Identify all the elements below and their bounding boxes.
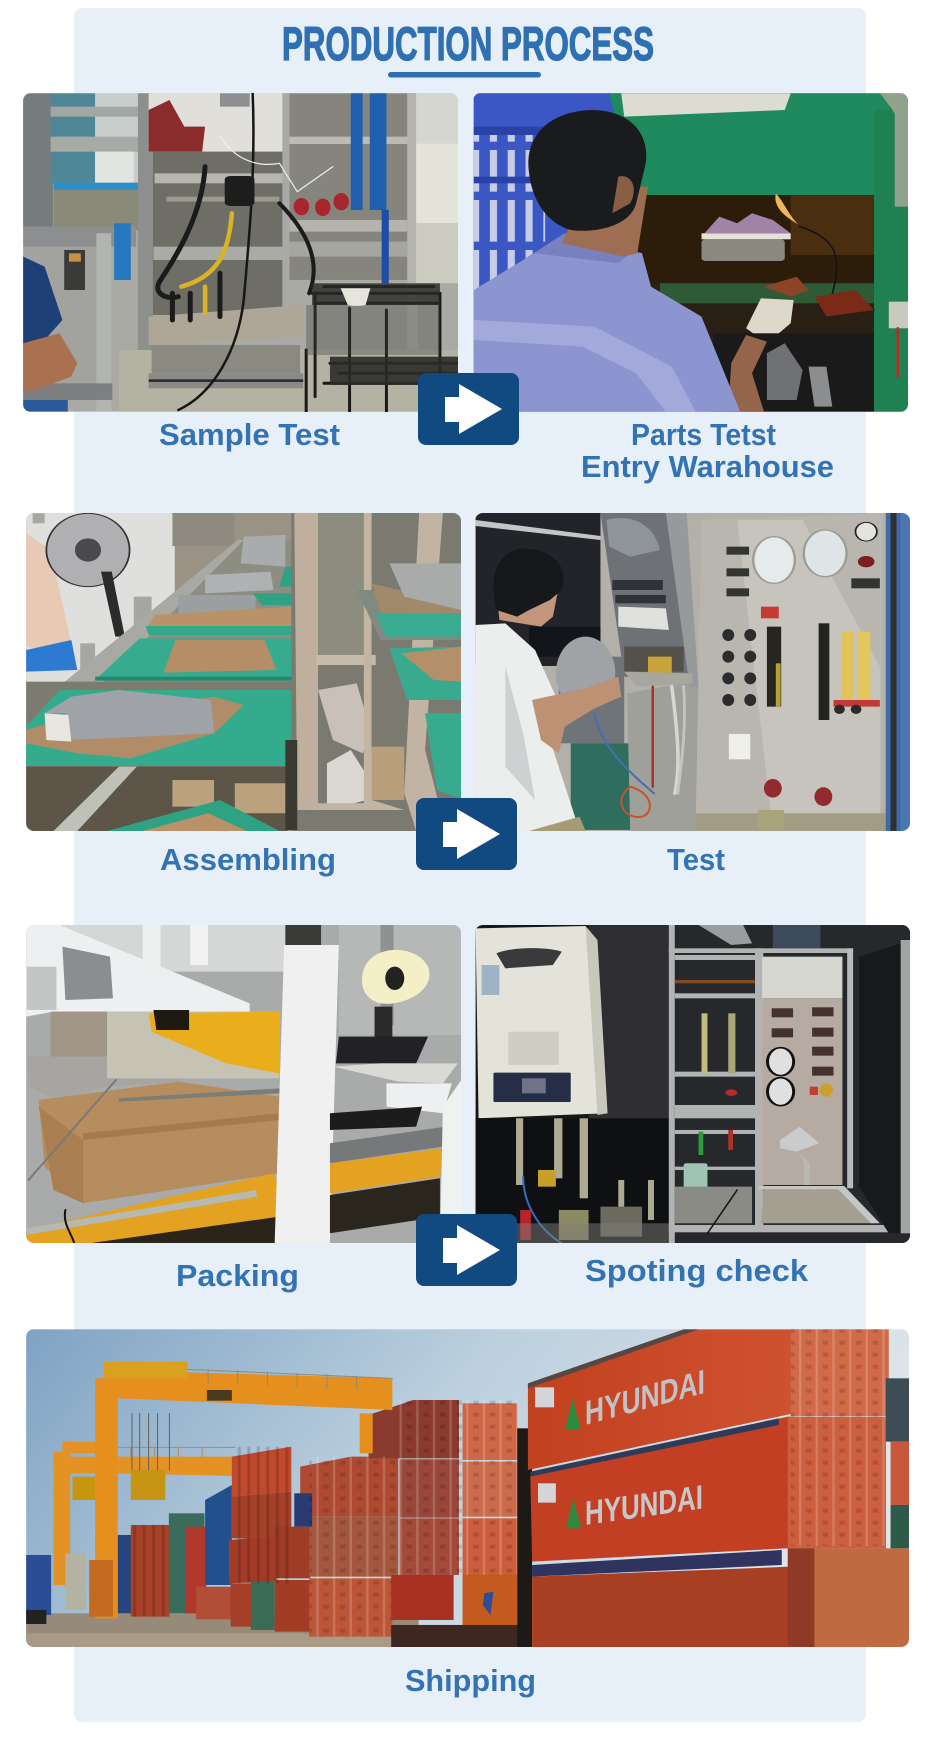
photo: packing	[26, 925, 461, 1243]
label: assembling: Assembling	[160, 842, 336, 877]
photo: test	[476, 513, 910, 831]
label: sample test: Sample Test	[159, 417, 340, 452]
arrow button 2	[416, 798, 517, 870]
label: parts test: Parts Tetst	[631, 417, 776, 452]
arrow button 3	[416, 1214, 517, 1286]
photo: shipping containers	[26, 1329, 910, 1648]
container stacks	[118, 1400, 532, 1648]
title: PRODUCTION PROCESS	[282, 17, 654, 70]
label: entry warehouse: Entry Warahouse	[581, 449, 834, 484]
title underline	[388, 72, 541, 78]
label: test: Test	[667, 842, 725, 877]
photo: assembling	[26, 513, 464, 831]
containers: hyundai stack	[528, 1329, 910, 1648]
photo: sample test	[23, 93, 458, 412]
photo: parts test	[474, 93, 908, 412]
crane: front	[95, 1362, 392, 1618]
arrow button 1	[418, 373, 519, 445]
label: shipping: Shipping	[405, 1663, 536, 1698]
label: spoting check: Spoting check	[585, 1253, 809, 1288]
label: packing: Packing	[176, 1258, 299, 1293]
hyundai lettering lower: HYUNDAI	[585, 1479, 703, 1533]
crane: rear	[54, 1442, 235, 1585]
photo: spoting check	[476, 925, 910, 1243]
hyundai lettering top: HYUNDAI	[585, 1363, 705, 1433]
